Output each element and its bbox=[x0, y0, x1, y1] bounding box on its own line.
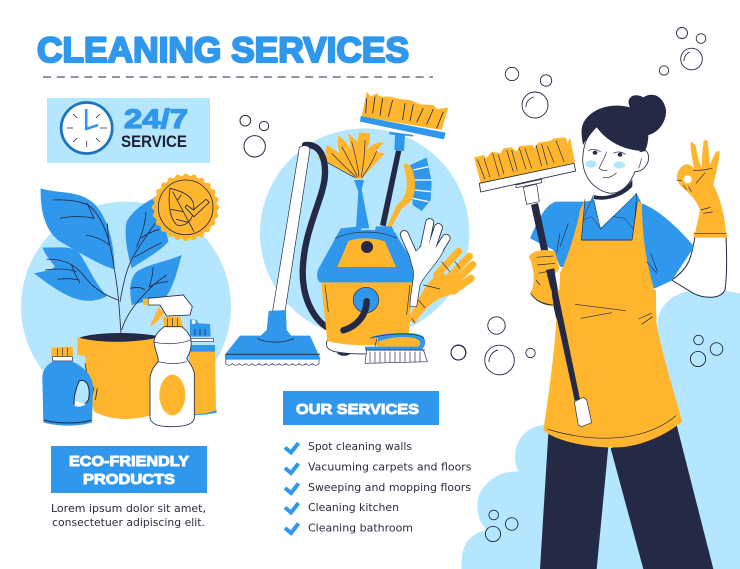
panel: our services heading: OUR SERVICES bbox=[296, 401, 419, 418]
broom head bbox=[474, 137, 576, 204]
broom stick bbox=[531, 203, 580, 399]
title dashed rule bbox=[43, 76, 433, 78]
panel: our services heading bbox=[283, 391, 439, 425]
facial features bbox=[585, 149, 642, 178]
products heading: PRODUCTS bbox=[83, 472, 175, 488]
push broom bbox=[360, 92, 448, 226]
eco badge bbox=[154, 176, 217, 239]
broom stick lower bbox=[551, 290, 580, 401]
blue detergent bottle bbox=[42, 347, 93, 426]
shirt bbox=[530, 193, 694, 288]
white glove bbox=[404, 223, 446, 307]
illustration: vacuum and cleaning tools bbox=[225, 92, 473, 365]
hair bbox=[582, 95, 666, 151]
glove base bbox=[531, 290, 553, 304]
person: cleaner bbox=[474, 95, 727, 569]
bubbles upper right bbox=[659, 28, 706, 75]
24/7 text: 24/7 bbox=[124, 104, 188, 134]
vacuum hose bbox=[303, 145, 367, 331]
item: bathroom: Cleaning bathroom bbox=[308, 522, 413, 534]
services list bbox=[285, 440, 472, 534]
bubbles upper left bbox=[505, 67, 552, 118]
eco description: consectetuer adipiscing elit. bbox=[52, 516, 205, 529]
yellow brush bbox=[387, 158, 432, 230]
duster bbox=[316, 132, 385, 228]
vacuum tube bbox=[273, 146, 310, 312]
item: spot cleaning: Spot cleaning walls bbox=[308, 440, 412, 453]
white spray bottle bbox=[143, 295, 194, 427]
eco description bbox=[51, 502, 206, 529]
item: sweeping: Sweeping and mopping floors bbox=[308, 481, 471, 494]
trousers bbox=[540, 425, 713, 569]
soap bubbles around person bbox=[451, 28, 723, 542]
bubbles bottom bbox=[485, 510, 518, 542]
soap bubbles bbox=[240, 115, 466, 360]
bubbles mid bbox=[451, 317, 535, 375]
scrub brush bbox=[365, 333, 427, 363]
aerosol can bbox=[188, 319, 217, 415]
item: kitchen: Cleaning kitchen bbox=[308, 501, 399, 514]
bubbles right bbox=[690, 335, 723, 367]
plant leaves bbox=[34, 188, 182, 333]
eco description: Lorem ipsum dolor sit amet, bbox=[51, 502, 206, 515]
yellow glove bbox=[408, 251, 473, 323]
OK-sign glove bbox=[677, 139, 726, 237]
panel: 24/7 service badge bbox=[47, 98, 210, 163]
panel: eco-friendly products bbox=[51, 446, 207, 493]
collar band bbox=[593, 179, 632, 200]
background clouds bbox=[462, 290, 740, 569]
vacuum body bbox=[317, 226, 417, 356]
face bbox=[583, 127, 649, 193]
raised arm bbox=[672, 235, 727, 297]
title: CLEANING SERVICES bbox=[37, 31, 409, 70]
left hand glove bbox=[529, 250, 563, 320]
service text: SERVICE bbox=[121, 133, 187, 151]
broom end cap bbox=[574, 397, 592, 427]
apron bbox=[558, 200, 657, 320]
vacuum floor head bbox=[225, 310, 321, 365]
upper body bbox=[474, 95, 727, 320]
neck and collar bbox=[583, 180, 637, 230]
background circle bbox=[260, 128, 469, 338]
lower apron bbox=[531, 290, 682, 447]
item: vacuuming: Vacuuming carpets and floors bbox=[308, 460, 472, 474]
background circle bbox=[21, 202, 231, 412]
eco heading: ECO-FRIENDLY bbox=[69, 454, 189, 470]
illustration: eco-friendly plant and bottles bbox=[21, 176, 231, 427]
pot bbox=[77, 333, 162, 419]
icon: clock bbox=[61, 102, 112, 154]
